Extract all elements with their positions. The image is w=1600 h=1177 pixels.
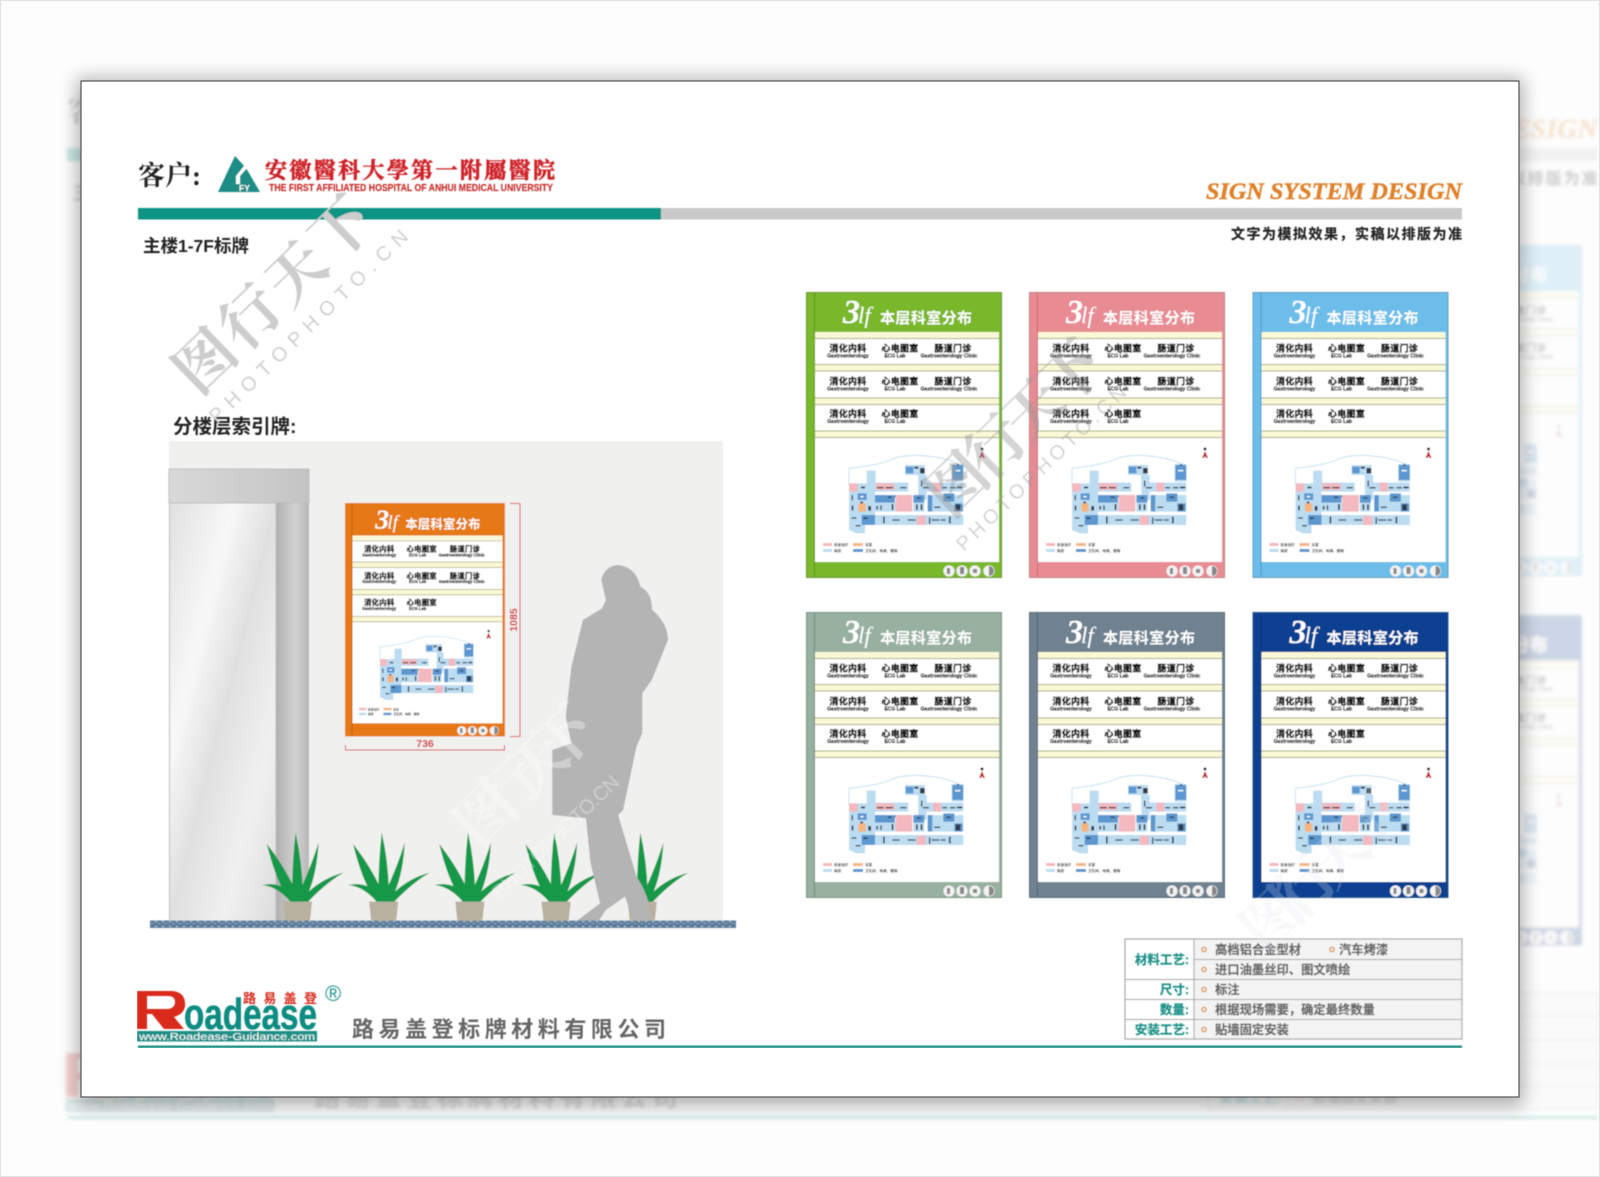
department rows: 心电图室 — [407, 571, 437, 580]
department rows: 肠道门诊 — [450, 571, 481, 580]
sign variant: pink: Gastroenterology — [1050, 419, 1092, 425]
sign variant: green: 检查治疗 — [834, 542, 849, 547]
footer icons — [457, 726, 499, 735]
sign variant: sky blue: 消化内科 — [1276, 342, 1313, 354]
sign variant: sage: Gastroenterology — [827, 706, 869, 712]
sign variant: navy: 病房 — [1280, 868, 1288, 873]
softened artwork layer — [137, 156, 1463, 1048]
sign variant: green: 消化内科 — [829, 408, 867, 419]
sign variant: sage: 本层科室分布 — [880, 629, 972, 647]
table bullets — [1202, 948, 1334, 1032]
white board panel — [81, 81, 1519, 1097]
sign header: lf — [387, 512, 401, 533]
sign variant: green: 诊室 — [865, 542, 873, 547]
department rows: ECG Lab — [409, 552, 427, 557]
sign variant: pink: ECG Lab — [1107, 419, 1129, 425]
sign variant: sky blue: 病房 — [1280, 548, 1288, 553]
watermark url: PHOTOPHOTO.CN — [205, 224, 415, 428]
department rows: Gastroenterology — [362, 579, 397, 584]
sign variant: slate: 病房 — [1057, 868, 1065, 873]
table values: 根据现场需要，确定最终数量 — [1215, 1002, 1375, 1017]
sign variant: navy: Gastroenterology — [1274, 739, 1316, 745]
sign variant: green: 病房 — [834, 548, 842, 553]
sign variant: sage: 卫生间、电梯、楼梯 — [865, 868, 898, 873]
sign variant: slate: 检查治疗 — [1057, 862, 1072, 867]
sign variant: sage: 病房 — [834, 868, 842, 873]
sign variant: navy: 消化内科 — [1276, 695, 1313, 706]
table labels: 尺寸: — [1160, 982, 1189, 997]
department rows: 消化内科 — [364, 598, 395, 607]
table values: 进口油墨丝印、图文喷绘 — [1215, 962, 1350, 977]
width dimension: 736 — [416, 738, 434, 750]
watermark url: PHOTOPHOTO.CN — [952, 380, 1133, 556]
sign variant: sky blue: 消化内科 — [1276, 408, 1313, 419]
registered mark: ® — [325, 981, 341, 1006]
client heading: 客户: — [138, 161, 201, 191]
sign variant: green: 心电图室 — [881, 408, 919, 419]
sign variant: green: Gastroenterology — [827, 354, 869, 360]
sign variant: green: Gastroenterology — [827, 386, 869, 392]
sign variant: pink: 心电图室 — [1104, 408, 1142, 419]
sign variant: navy: 消化内科 — [1276, 728, 1313, 739]
department rows: Gastroenterology Clinic — [439, 552, 486, 557]
sign variant: sky blue: 诊室 — [1312, 542, 1319, 547]
sign variant: slate: 本层科室分布 — [1103, 629, 1195, 647]
sign variant: slate: Gastroenterology — [1050, 706, 1092, 712]
sign variant: sage — [806, 612, 1002, 898]
table labels — [1135, 952, 1189, 1037]
sign variant: navy: Gastroenterology Clinic — [1367, 706, 1424, 712]
sign variant: sky blue: 3 — [1288, 294, 1306, 331]
sign variant: pink: 心电图室 — [1104, 342, 1142, 354]
sign variant: sage: 肠道门诊 — [934, 662, 972, 674]
hospital English name: THE FIRST AFFILIATED HOSPITAL OF ANHUI MEDICAL UNIVERSITY — [269, 183, 553, 194]
sign variant: slate: lf — [1081, 623, 1097, 648]
subsection title: 分楼层索引牌: — [173, 416, 296, 438]
sign variant: slate: 心电图室 — [1104, 662, 1142, 674]
sign variant: sky blue: Gastroenterology — [1274, 386, 1316, 392]
sign variant: pink: 检查治疗 — [1057, 542, 1072, 547]
icon: hospital triangle: FY — [239, 183, 250, 193]
sign variant: slate: 心电图室 — [1104, 695, 1142, 706]
logo R mark — [137, 991, 185, 1029]
legend labels: 病房 — [368, 711, 374, 716]
hospital Chinese name: 安徽醫科大學第一附屬醫院 — [265, 158, 555, 183]
sign variant: sage: ECG Lab — [884, 706, 906, 712]
sign variant: sky blue: Gastroenterology — [1274, 419, 1316, 425]
sign variant: navy: Gastroenterology — [1274, 674, 1316, 680]
sign variant: pink: ECG Lab — [1107, 354, 1129, 360]
department rows — [362, 545, 486, 611]
sign variant: green: ECG Lab — [884, 354, 906, 360]
sign variant: slate: 消化内科 — [1052, 695, 1090, 706]
sign variant: navy: 肠道门诊 — [1381, 695, 1418, 706]
sign variant: green: 消化内科 — [829, 375, 867, 386]
sign variant: pink: Gastroenterology Clinic — [1144, 386, 1201, 392]
sign variant: sky blue: Gastroenterology Clinic — [1367, 386, 1424, 392]
sign variant: green: 心电图室 — [881, 375, 919, 386]
sign variant: sage: 3 — [842, 614, 860, 651]
sign variant: sky blue: 肠道门诊 — [1381, 342, 1418, 354]
sign variant: sky blue: Gastroenterology Clinic — [1367, 354, 1424, 360]
sign variant: sky blue: 心电图室 — [1328, 408, 1365, 419]
sign variant: sage: 检查治疗 — [834, 862, 849, 867]
sign variant: green: 本层科室分布 — [880, 309, 972, 327]
sign variant: sky blue: Gastroenterology — [1274, 354, 1316, 360]
sign variant: green: 卫生间、电梯、楼梯 — [865, 548, 898, 553]
logo wordmark: oadease — [184, 990, 317, 1039]
logo url bar: www.Roadease-Guidance.com — [138, 1031, 315, 1043]
sign variant: pink: 肠道门诊 — [1157, 375, 1195, 386]
sign variant: pink: 卫生间、电梯、楼梯 — [1088, 548, 1121, 553]
woman silhouette — [552, 565, 668, 921]
department rows: 心电图室 — [407, 598, 437, 607]
department rows: Gastroenterology Clinic — [439, 579, 486, 584]
sign variant: pink: 诊室 — [1088, 542, 1096, 547]
watermark over wall scene — [441, 693, 626, 904]
sign variant: green: 肠道门诊 — [934, 375, 972, 386]
sign variant: sky blue: 卫生间、电梯、楼梯 — [1312, 548, 1344, 553]
sign variant: pink: 消化内科 — [1052, 342, 1090, 354]
table values: 标注 — [1215, 982, 1240, 997]
board content — [137, 156, 1463, 1048]
sign variant: sky blue: 肠道门诊 — [1381, 375, 1418, 386]
sign variant: slate: ECG Lab — [1107, 739, 1129, 745]
sign variant: slate: 消化内科 — [1052, 662, 1090, 674]
sign header: 3 — [374, 504, 389, 535]
sign variant: sky blue: 心电图室 — [1328, 342, 1365, 354]
sign variant: navy: 消化内科 — [1276, 662, 1313, 674]
sign variant: pink: 消化内科 — [1052, 375, 1090, 386]
sign variant: navy: lf — [1304, 623, 1321, 648]
sign variant: green: 心电图室 — [881, 342, 919, 354]
sign variant: green: Gastroenterology — [827, 419, 869, 425]
sign variant: navy: 肠道门诊 — [1381, 662, 1418, 674]
sign variant: sky blue: 本层科室分布 — [1326, 309, 1419, 327]
table labels: 材料工艺: — [1135, 952, 1189, 967]
sign variant: pink: lf — [1081, 303, 1097, 328]
sign variant: pink: 心电图室 — [1104, 375, 1142, 386]
legend labels: 诊室 — [393, 706, 399, 711]
sign variant: green: ECG Lab — [884, 419, 906, 425]
sign variant: sage: lf — [858, 623, 874, 648]
dimension lines — [346, 504, 520, 750]
sign variant: slate: ECG Lab — [1107, 674, 1129, 680]
sign variant: pink — [1029, 292, 1225, 578]
sign variant: green: ECG Lab — [884, 386, 906, 392]
table values: 贴墙固定安装 — [1215, 1022, 1289, 1037]
sign variant: slate: 诊室 — [1088, 862, 1096, 867]
department rows: 心电图室 — [407, 545, 437, 554]
sign variant: sage: ECG Lab — [884, 674, 906, 680]
sign variant: pink: ECG Lab — [1107, 386, 1129, 392]
tagline: SIGN SYSTEM DESIGN — [1206, 179, 1463, 204]
sign variant: sky blue: 检查治疗 — [1280, 542, 1295, 547]
sign variant: pink: 肠道门诊 — [1157, 342, 1195, 354]
sign variant: navy: 3 — [1288, 614, 1306, 651]
sign variant: pink: 病房 — [1057, 548, 1065, 553]
sign variant: navy: 心电图室 — [1328, 695, 1365, 706]
sign variant: sage: Gastroenterology — [827, 674, 869, 680]
sign variant: slate: Gastroenterology — [1050, 674, 1092, 680]
sign variant: slate: 卫生间、电梯、楼梯 — [1088, 868, 1121, 873]
sign header — [374, 504, 481, 535]
sign variant: pink: 3 — [1065, 294, 1083, 331]
wall scene — [150, 441, 736, 928]
department rows: 消化内科 — [364, 545, 395, 554]
table grid — [1125, 939, 1462, 1039]
company name: 路易盖登标牌材料有限公司 — [352, 1017, 666, 1042]
sign variant: sage: 消化内科 — [829, 728, 867, 739]
height dimension: 1085 — [508, 608, 520, 632]
sign variant: sage: 消化内科 — [829, 695, 867, 706]
sign variant: navy: ECG Lab — [1331, 706, 1352, 712]
sign variant: sage: Gastroenterology Clinic — [921, 706, 978, 712]
footer rule — [138, 1046, 1462, 1048]
legend labels: 检查治疗 — [368, 706, 380, 711]
sign variant: sage: Gastroenterology — [827, 739, 869, 745]
watermark calligraphy: 图行天下 — [161, 185, 388, 406]
section title: 主楼1-7F标牌 — [143, 236, 249, 256]
department rows: ECG Lab — [409, 606, 427, 611]
sign variant: sage: 肠道门诊 — [934, 695, 972, 706]
table values: 汽车烤漆 — [1339, 942, 1388, 957]
specification table — [1125, 939, 1462, 1039]
sign variant: sky blue: ECG Lab — [1331, 419, 1352, 425]
roadease logo — [137, 981, 341, 1043]
watermark url: PHOTOPHOTO.CN — [488, 770, 626, 904]
sign variant: slate — [1029, 612, 1225, 898]
sign variant: green: Gastroenterology Clinic — [921, 386, 978, 392]
sign variant: slate: 消化内科 — [1052, 728, 1090, 739]
sign variant: pink: 本层科室分布 — [1103, 309, 1195, 327]
sign variant: green: 消化内科 — [829, 342, 867, 354]
panel shadow — [77, 78, 1523, 1106]
sign variant: navy: 卫生间、电梯、楼梯 — [1312, 868, 1344, 873]
sign variant: navy: Gastroenterology — [1274, 706, 1316, 712]
legend labels: 卫生间、电梯、楼梯 — [393, 711, 420, 716]
sign variant: navy: 诊室 — [1312, 862, 1319, 867]
sign variant: slate: 肠道门诊 — [1157, 695, 1195, 706]
watermark calligraphy: 图行天下 — [441, 693, 610, 859]
logo Chinese name: 路易盖登 — [243, 991, 317, 1006]
door frame and glass — [169, 469, 309, 926]
sign variant: sky blue: ECG Lab — [1331, 354, 1352, 360]
sign variant: sage: ECG Lab — [884, 739, 906, 745]
sign body — [345, 503, 505, 736]
table labels: 数量: — [1160, 1002, 1189, 1017]
sign variant: slate: Gastroenterology Clinic — [1144, 706, 1201, 712]
sign variant: slate: Gastroenterology Clinic — [1144, 674, 1201, 680]
sign variant: sky blue: 心电图室 — [1328, 375, 1365, 386]
table labels: 安装工艺: — [1135, 1022, 1189, 1037]
sign variant: sky blue — [1252, 292, 1448, 578]
sign variant: sage: Gastroenterology Clinic — [921, 674, 978, 680]
sign variant: navy: 本层科室分布 — [1326, 629, 1419, 647]
table values: 高档铝合金型材 — [1215, 942, 1301, 957]
sign variant: green: Gastroenterology Clinic — [921, 354, 978, 360]
sign variant: pink: Gastroenterology Clinic — [1144, 354, 1201, 360]
table values — [1215, 942, 1388, 1037]
sign variant: green: 3 — [842, 294, 860, 331]
sign variant: sky blue: lf — [1304, 303, 1321, 328]
department rows: 肠道门诊 — [450, 545, 481, 554]
sign variant: green: lf — [858, 303, 874, 328]
sign variant: green — [806, 292, 1002, 578]
sign variant: slate: Gastroenterology — [1050, 739, 1092, 745]
disclaimer note: 文字为模拟效果，实稿以排版为准 — [1231, 226, 1462, 242]
sign variant: sage: 心电图室 — [881, 728, 919, 739]
watermark over signs — [913, 328, 1133, 556]
sign variant: slate: 肠道门诊 — [1157, 662, 1195, 674]
sign variant: navy: ECG Lab — [1331, 739, 1352, 745]
sign variant: green: 肠道门诊 — [934, 342, 972, 354]
sign variant: navy: 心电图室 — [1328, 662, 1365, 674]
floor plan — [359, 630, 491, 715]
wall — [169, 441, 723, 921]
sign variant: pink: Gastroenterology — [1050, 386, 1092, 392]
sign variant: slate: 心电图室 — [1104, 728, 1142, 739]
sign variant: sage: 诊室 — [865, 862, 873, 867]
sign variant: sky blue: ECG Lab — [1331, 386, 1352, 392]
sign header: 本层科室分布 — [405, 516, 481, 531]
watermark top-left — [161, 185, 415, 428]
watermark lower right: 图行天下 — [1228, 777, 1419, 964]
header bar — [138, 208, 1462, 220]
floor strip — [150, 920, 736, 928]
sign variant: navy — [1252, 612, 1448, 898]
sign variant: slate: ECG Lab — [1107, 706, 1129, 712]
sign variant: navy: ECG Lab — [1331, 674, 1352, 680]
sign variant: navy: 检查治疗 — [1280, 862, 1295, 867]
sign variant: sage: 消化内科 — [829, 662, 867, 674]
watermark calligraphy: 图行天下 — [913, 328, 1118, 529]
department rows: ECG Lab — [409, 579, 427, 584]
hospital logo — [218, 156, 555, 194]
department rows: Gastroenterology — [362, 552, 397, 557]
sign variant: navy: 心电图室 — [1328, 728, 1365, 739]
icon: hospital triangle — [218, 156, 260, 193]
legend labels — [368, 706, 420, 716]
sign variant: slate: 3 — [1065, 614, 1083, 651]
sign variant: sky blue: 消化内科 — [1276, 375, 1313, 386]
plants — [262, 833, 688, 921]
sign variant: navy: Gastroenterology Clinic — [1367, 674, 1424, 680]
department rows: Gastroenterology — [362, 606, 397, 611]
sign variant: sage: 心电图室 — [881, 695, 919, 706]
department rows: 消化内科 — [364, 571, 395, 580]
orange wall sign — [345, 503, 505, 736]
sign variant: pink: 消化内科 — [1052, 408, 1090, 419]
sign variant: sage: 心电图室 — [881, 662, 919, 674]
sign variant: pink: Gastroenterology — [1050, 354, 1092, 360]
